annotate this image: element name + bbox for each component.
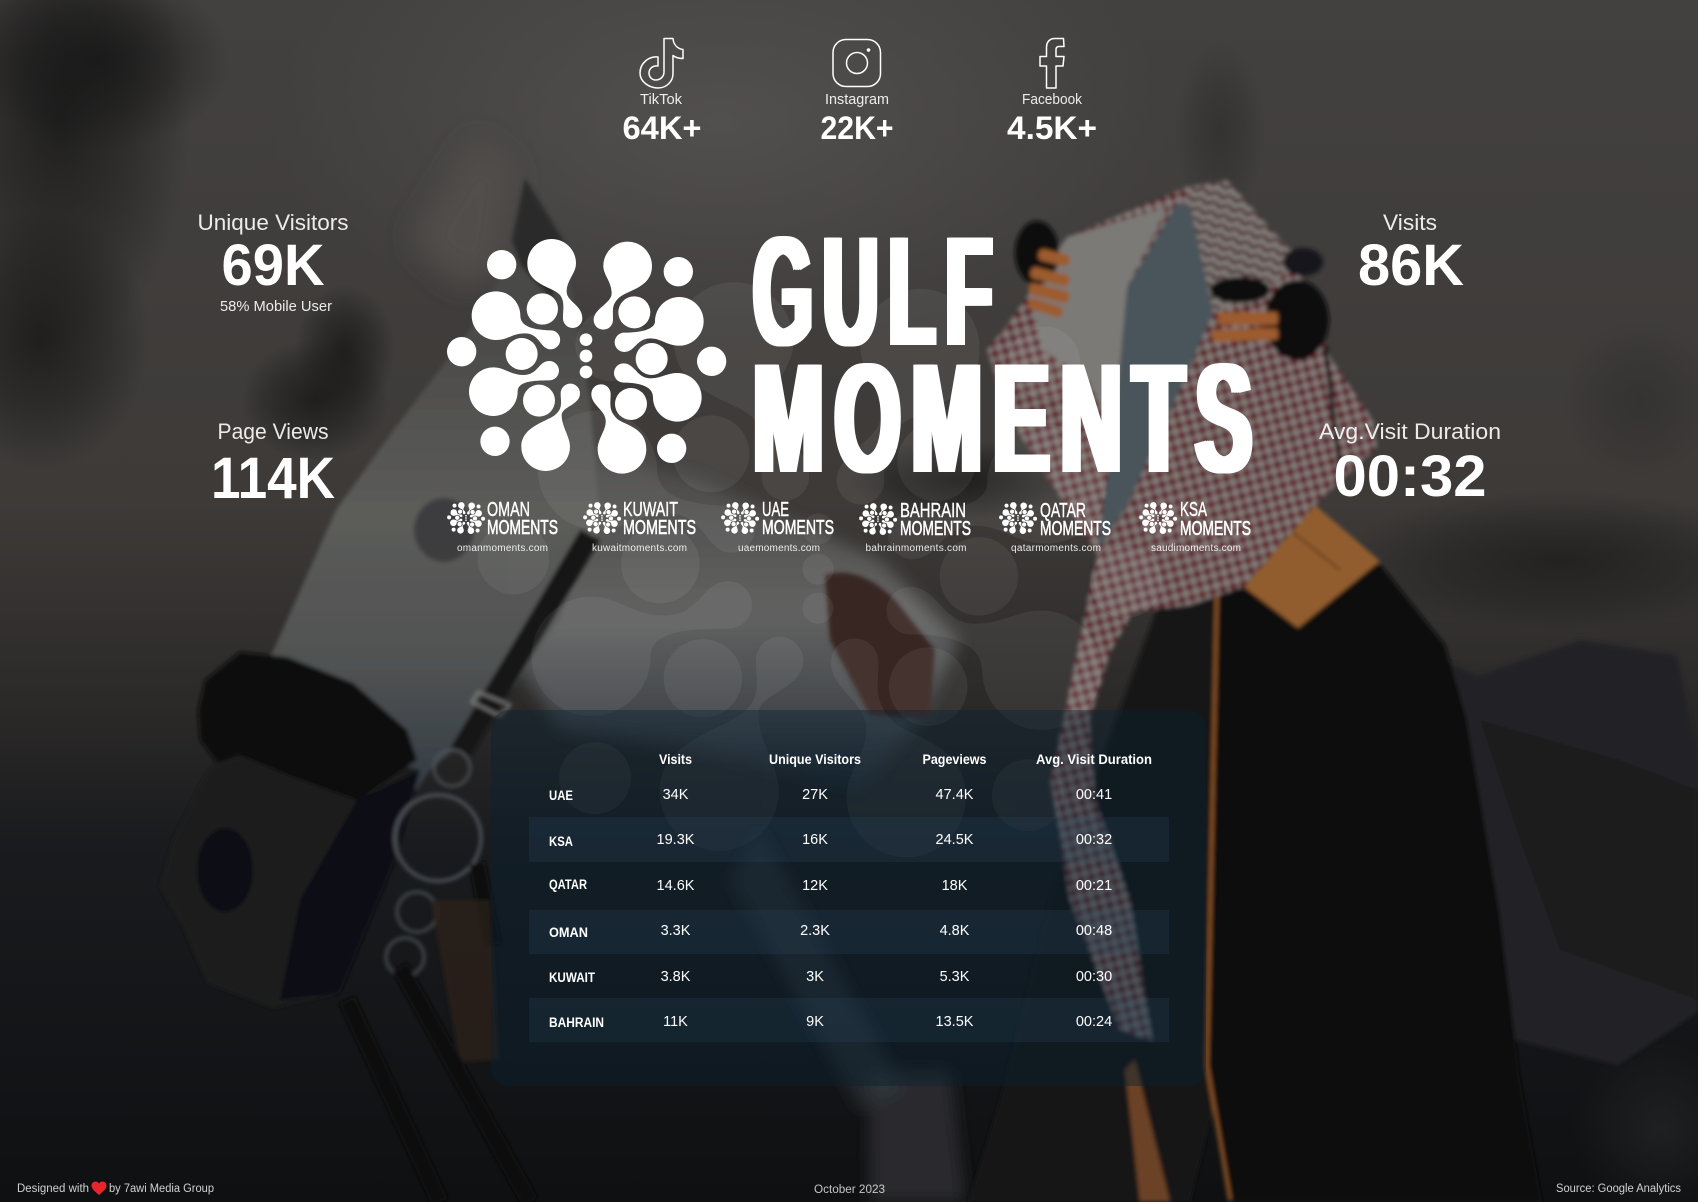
social stat: Instagram: 22K+ xyxy=(820,110,894,146)
row: Qatar xyxy=(549,877,1112,894)
row: Oman: OMAN xyxy=(549,925,588,940)
row: Kuwait xyxy=(549,969,1112,985)
row: KSA: 19.3K xyxy=(657,832,695,848)
table headers: Avg. Visit Duration xyxy=(1036,752,1152,767)
collar xyxy=(1244,505,1380,628)
sub-brand: KSA Moments: saudimoments.com xyxy=(1151,543,1241,554)
sub-brand: Bahrain Moments: bahrainmoments.com xyxy=(866,543,966,554)
saddle xyxy=(1445,640,1698,1065)
social stat: TikTok: TikTok xyxy=(640,92,683,108)
row: Qatar: 00:21 xyxy=(1076,878,1112,894)
sub-brand: Qatar Moments: qatarmoments.com xyxy=(1011,543,1101,554)
sub-brand: Bahrain Moments xyxy=(859,500,971,554)
stat: unique visitors: 69K xyxy=(222,233,325,298)
row: KSA: 16K xyxy=(802,832,828,848)
table headers: Visits xyxy=(659,752,692,767)
striped row Oman xyxy=(529,910,1169,954)
striped row Bahrain xyxy=(529,998,1169,1042)
sub-brand: Kuwait Moments: MOMENTS xyxy=(623,517,696,539)
stat: visits: 86K xyxy=(1358,233,1464,298)
row: Bahrain: 11K xyxy=(663,1014,688,1030)
title: Gulf Moments: GULF xyxy=(753,205,1002,379)
sub-brand: UAE Moments: UAE xyxy=(762,499,789,521)
sub-brand: Qatar Moments: MOMENTS xyxy=(1040,518,1111,540)
row: Bahrain: 13.5K xyxy=(936,1014,974,1030)
sub-brand: Kuwait Moments: kuwaitmoments.com xyxy=(592,543,687,554)
stat: page views xyxy=(211,419,335,511)
watermark logo xyxy=(477,282,1162,857)
sub-brand: Oman Moments: omanmoments.com xyxy=(457,543,548,554)
row: Qatar: QATAR xyxy=(549,877,587,892)
panel: country table xyxy=(491,710,1206,1086)
icon: heart xyxy=(92,1182,106,1195)
row: Oman: 00:48 xyxy=(1076,923,1112,939)
stat: page views: 114K xyxy=(211,446,335,511)
title: Gulf Moments: MOMENTS xyxy=(753,332,1263,506)
social stat: Facebook: 4.5K+ xyxy=(1007,110,1097,146)
agal cords xyxy=(1015,221,1059,285)
row: Kuwait: 3K xyxy=(806,969,824,985)
keffiyeh xyxy=(987,180,1377,1040)
row: UAE: 47.4K xyxy=(936,787,974,803)
row: Kuwait: KUWAIT xyxy=(549,970,596,985)
title: Gulf Moments xyxy=(752,205,1263,506)
row: KSA: 00:32 xyxy=(1076,832,1112,848)
bridle xyxy=(460,535,590,753)
stat: visits: Visits xyxy=(1383,210,1437,235)
icon: Instagram xyxy=(833,40,880,86)
sub-brand: KSA Moments: KSA xyxy=(1180,499,1207,521)
horse face xyxy=(270,178,600,790)
row: Kuwait: 3.8K xyxy=(661,969,691,985)
rider cloak xyxy=(1206,564,1542,1202)
sub-brand: Oman Moments: MOMENTS xyxy=(487,517,558,539)
table headers xyxy=(659,752,1152,767)
sub-brand: UAE Moments: MOMENTS xyxy=(762,517,834,539)
stat: unique visitors: Unique Visitors xyxy=(198,210,348,235)
sub-brand: Kuwait Moments: KUWAIT xyxy=(623,499,678,521)
sub-brand: UAE Moments xyxy=(721,499,834,554)
sub-brand: UAE Moments: uaemoments.com xyxy=(738,543,820,554)
icon: TikTok xyxy=(640,38,683,88)
row: Kuwait: 00:30 xyxy=(1076,969,1112,985)
row: Oman: 2.3K xyxy=(800,923,830,939)
sub-brand: Bahrain Moments: MOMENTS xyxy=(900,518,971,540)
row: Oman: 3.3K xyxy=(661,923,691,939)
under-robe xyxy=(968,580,1240,1202)
row: Oman xyxy=(549,923,1112,940)
row: KSA: 24.5K xyxy=(936,832,974,848)
social stat: Instagram: Instagram xyxy=(825,92,889,108)
row: UAE: 27K xyxy=(802,787,828,803)
sub-brand: Oman Moments: OMAN xyxy=(487,499,530,521)
stat: unique visitors xyxy=(198,210,348,315)
sub-brand: Qatar Moments: QATAR xyxy=(1040,500,1086,522)
row: UAE: UAE xyxy=(549,788,573,803)
row: Bahrain: BAHRAIN xyxy=(549,1015,604,1030)
stat: average visit duration: 00:32 xyxy=(1334,444,1486,509)
sub-brand: Qatar Moments xyxy=(999,500,1111,554)
icon: Facebook xyxy=(1040,38,1064,88)
main logo mark xyxy=(447,239,726,474)
footer credit: Designed with xyxy=(17,1183,89,1195)
stat: average visit duration: Avg.Visit Duration xyxy=(1319,419,1501,444)
table headers: Pageviews xyxy=(922,752,986,767)
striped row KSA xyxy=(529,817,1169,862)
social stat: TikTok xyxy=(622,38,702,146)
sub-brand: KSA Moments: MOMENTS xyxy=(1180,518,1251,540)
stat: page views: Page Views xyxy=(218,419,328,444)
row: KSA: KSA xyxy=(549,834,573,849)
horse nose xyxy=(160,740,420,1008)
social stat: Facebook: Facebook xyxy=(1022,92,1083,108)
social stat: TikTok: 64K+ xyxy=(622,110,702,146)
row: UAE: 00:41 xyxy=(1076,787,1112,803)
footer credit xyxy=(17,1182,214,1195)
sub-brand: KSA Moments xyxy=(1139,499,1251,554)
footer date: October 2023 xyxy=(814,1184,885,1196)
stat: average visit duration xyxy=(1319,419,1501,509)
social stat: Facebook xyxy=(1007,38,1097,146)
row: UAE xyxy=(549,787,1112,803)
table headers: Unique Visitors xyxy=(769,752,861,767)
row: Oman: 4.8K xyxy=(940,923,970,939)
row: Qatar: 12K xyxy=(802,878,828,894)
hand xyxy=(825,573,935,720)
noseband xyxy=(198,652,417,800)
row: Qatar: 18K xyxy=(942,878,968,894)
sub-brand: Oman Moments xyxy=(447,499,558,554)
social stat: Instagram xyxy=(820,40,894,146)
row: Bahrain: 9K xyxy=(806,1014,824,1030)
row: KSA xyxy=(549,832,1112,849)
sub-brand: Kuwait Moments xyxy=(583,499,696,554)
sub-brand: Bahrain Moments: BAHRAIN xyxy=(900,500,966,522)
row: UAE: 34K xyxy=(663,787,689,803)
footer source: Source: Google Analytics xyxy=(1556,1183,1681,1195)
footer credit: by 7awi Media Group xyxy=(109,1183,214,1195)
row: Bahrain xyxy=(549,1014,1112,1030)
stat: unique visitors: 58% Mobile User xyxy=(220,299,332,315)
row: Qatar: 14.6K xyxy=(657,878,695,894)
row: Kuwait: 5.3K xyxy=(940,969,970,985)
row: Bahrain: 00:24 xyxy=(1076,1014,1112,1030)
